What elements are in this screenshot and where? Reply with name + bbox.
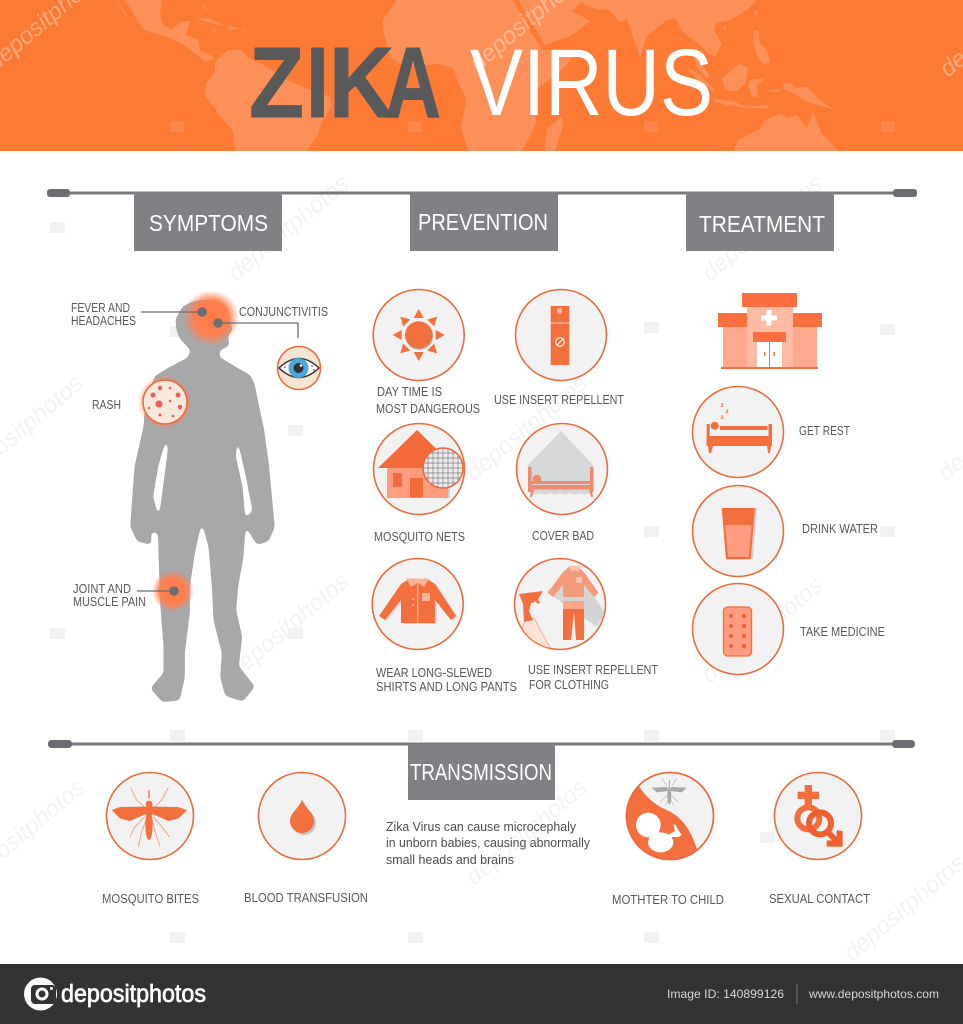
- logo wordmark: depositphotos: [61, 980, 206, 1008]
- heading: transmission: [408, 744, 555, 800]
- title: I: [306, 27, 329, 139]
- icon: medicine blister: [692, 584, 784, 674]
- label: take medicine: TAKE MEDICINE: [800, 625, 885, 639]
- label: cover bad: COVER BAD: [532, 529, 594, 543]
- label: blood transfusion: BLOOD TRANSFUSION: [244, 891, 368, 905]
- label: rash: RASH: [92, 398, 121, 412]
- label: joint and muscle pain: [73, 582, 146, 609]
- header banner: [0, 0, 963, 151]
- label: get rest: GET REST: [799, 424, 850, 438]
- bottom divider: [48, 740, 915, 748]
- label: mosquito bites: MOSQUITO BITES: [102, 892, 199, 906]
- icon: bed rest: [692, 386, 784, 478]
- callout lines: [137, 312, 298, 591]
- rash magnifier: [138, 375, 192, 429]
- watermarks: depositphotos: [223, 170, 354, 287]
- website url: www.depositphotos.com: [808, 987, 939, 1001]
- top divider with section tabs: [47, 189, 917, 251]
- title: [249, 27, 713, 139]
- label: joint and muscle pain: JOINT AND: [73, 582, 131, 596]
- watermarks: depositphotos: [461, 774, 592, 891]
- label: repellent for clothing: USE INSERT REPELLENT: [528, 663, 658, 677]
- label: fever and headaches: HEADACHES: [71, 314, 136, 328]
- icon: blood drop: [258, 772, 346, 860]
- icon: glass of water: [692, 486, 784, 576]
- label: use insert repellent: USE INSERT REPELLENT: [494, 393, 624, 407]
- callout dots: [169, 307, 223, 596]
- icon: bed rest: z: [720, 402, 724, 409]
- label: day time: MOST DANGEROUS: [376, 402, 480, 416]
- watermarks: depositphotos: [697, 170, 828, 287]
- watermarks: depositphotos: [461, 370, 592, 487]
- human body silhouette: [131, 300, 274, 701]
- icon: camera logo: [24, 978, 57, 1010]
- icon: bed rest: z: [726, 408, 730, 415]
- label: drink water: DRINK WATER: [802, 522, 878, 536]
- watermarks: depositphotos: [223, 568, 354, 685]
- label: mosquito nets: MOSQUITO NETS: [374, 530, 465, 544]
- label: repellent for clothing: [528, 663, 658, 692]
- title: K: [329, 27, 394, 139]
- panel: treatment: [692, 293, 885, 674]
- footer bar: [0, 964, 963, 1024]
- label: fever and headaches: [71, 301, 136, 328]
- title: VIRUS: [470, 30, 713, 136]
- icon: hospital: [718, 293, 822, 369]
- icon: mother to child: [620, 772, 714, 865]
- heading: symptoms: [134, 192, 282, 251]
- image id: Image ID: 140899126: [667, 987, 784, 1001]
- label: repellent for clothing: FOR CLOTHING: [529, 678, 609, 692]
- title: A: [385, 27, 441, 139]
- label: day time: [376, 385, 480, 416]
- text block: microcephaly note: Zika Virus can cause microcephaly: [386, 820, 577, 834]
- icon: sun: [373, 290, 464, 380]
- label: wear long sleeved: WEAR LONG-SLEWED: [376, 666, 492, 680]
- label: joint and muscle pain: MUSCLE PAIN: [73, 595, 146, 609]
- icon: bed under net: [516, 424, 608, 514]
- label: fever and headaches: FEVER AND: [71, 301, 130, 315]
- icon: mosquito: [106, 772, 194, 860]
- heading: prevention: [410, 192, 558, 251]
- watermarks: depositphotos: [697, 572, 828, 689]
- panel: symptoms: [71, 290, 328, 701]
- icon: bed rest: z: [720, 414, 724, 421]
- icon: spray on clothing: [514, 558, 606, 651]
- world map: [115, 0, 838, 151]
- label: mother to child: MOTHTER TO CHILD: [612, 893, 724, 907]
- label: wear long sleeved: [376, 666, 517, 694]
- text block: microcephaly note: in unborn babies, causing abnormally: [386, 836, 591, 850]
- heading: transmission: TRANSMISSION: [410, 759, 552, 785]
- heading: symptoms: SYMPTOMS: [149, 210, 268, 236]
- icon: sexual contact symbols: [774, 772, 862, 860]
- label: wear long sleeved: SHIRTS AND LONG PANTS: [376, 680, 517, 694]
- head pain glow: [183, 290, 239, 346]
- heading: treatment: TREATMENT: [699, 211, 825, 237]
- panel: prevention: [372, 290, 658, 694]
- label: conjunctivitis: CONJUNCTIVITIS: [239, 305, 328, 319]
- text block: microcephaly note: small heads and brains: [386, 853, 514, 867]
- text block: microcephaly note: [386, 820, 591, 867]
- label: day time: DAY TIME IS: [377, 385, 442, 399]
- knee pain glow: [152, 570, 194, 612]
- heading: treatment: [686, 192, 834, 251]
- label: sexual contact: SEXUAL CONTACT: [769, 892, 870, 906]
- panel: transmission: [102, 744, 870, 907]
- icon: repellent spray can: [516, 290, 606, 380]
- icon: house with net: [374, 424, 464, 514]
- title: Z: [249, 27, 304, 139]
- icon: long sleeved shirt: [372, 558, 463, 650]
- eye icon: [278, 346, 320, 390]
- heading: prevention: PREVENTION: [418, 209, 548, 235]
